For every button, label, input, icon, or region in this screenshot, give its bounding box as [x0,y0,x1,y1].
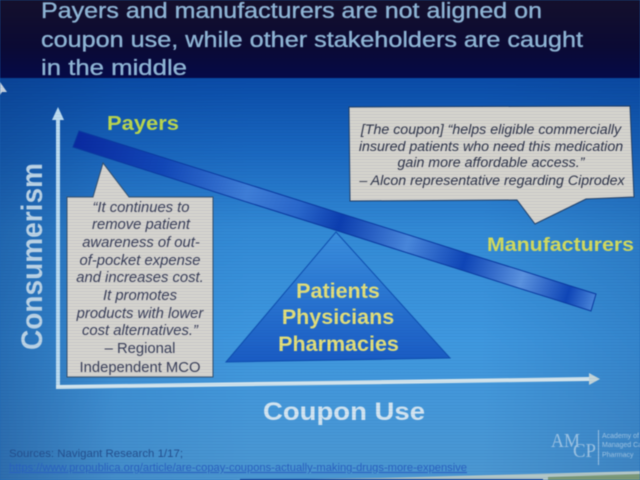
callout: manufacturer quote: insured patients who need this medication [359,139,623,155]
callout: payer quote: cost alternatives.” [82,323,199,339]
stakeholders in the middle: Pharmacies [278,332,399,356]
callout: manufacturer quote: gain more affordable access.” [398,155,586,171]
logo: AMCP: CP [573,440,596,462]
stakeholders in the middle [278,279,399,356]
callout: manufacturer quote [349,106,634,224]
icon: mouse cursor [0,82,7,95]
chart axes [52,107,600,389]
callout: payer quote: – Regional [105,341,175,357]
sources: https://www.propublica.org/article/are-copay-coupons-actually-making-drugs-more-expensive [9,462,467,474]
callout: manufacturer quote: – Alcon representative regarding Ciprodex [358,173,626,189]
sources [9,448,467,474]
callout: payer quote: of-pocket expense [80,253,200,269]
logo: AMCP: Pharmacy [602,452,634,459]
logo: AMCP: Academy of [602,433,639,440]
callout: manufacturer quote: [The coupon] “helps eligible commercially [360,122,622,138]
label: manufacturers: Manufacturers [487,235,634,256]
callout: payer quote: products with lower [76,306,204,322]
callout: payer quote: awareness of out- [82,235,200,251]
title band [0,0,640,78]
callout: payer quote: Independent MCO [80,360,200,376]
callout: payer quote: It promotes [103,288,178,304]
seesaw beam [73,131,596,311]
logo: AMCP: AM [551,430,580,452]
label: payers: Payers [107,113,179,135]
sources: Sources: Navigant Research 1/17; [9,448,183,460]
x axis label: Coupon Use [263,398,425,426]
title: coupon use, while other stakeholders are caught [41,27,583,52]
callout: payer quote: and increases cost. [76,270,204,286]
stakeholders in the middle: Patients [296,279,380,303]
y axis label: Consumerism [16,163,49,350]
callout: payer quote: remove patient [92,217,191,233]
monitor bottom edge [230,471,640,480]
stakeholders in the middle: Physicians [282,305,394,329]
triangle fulcrum [226,232,450,362]
callout: payer quote: “It continues to [92,200,190,216]
callout: payer quote [67,163,213,377]
logo: AMCP [551,430,640,465]
title [41,0,583,80]
title: in the middle [41,55,187,80]
